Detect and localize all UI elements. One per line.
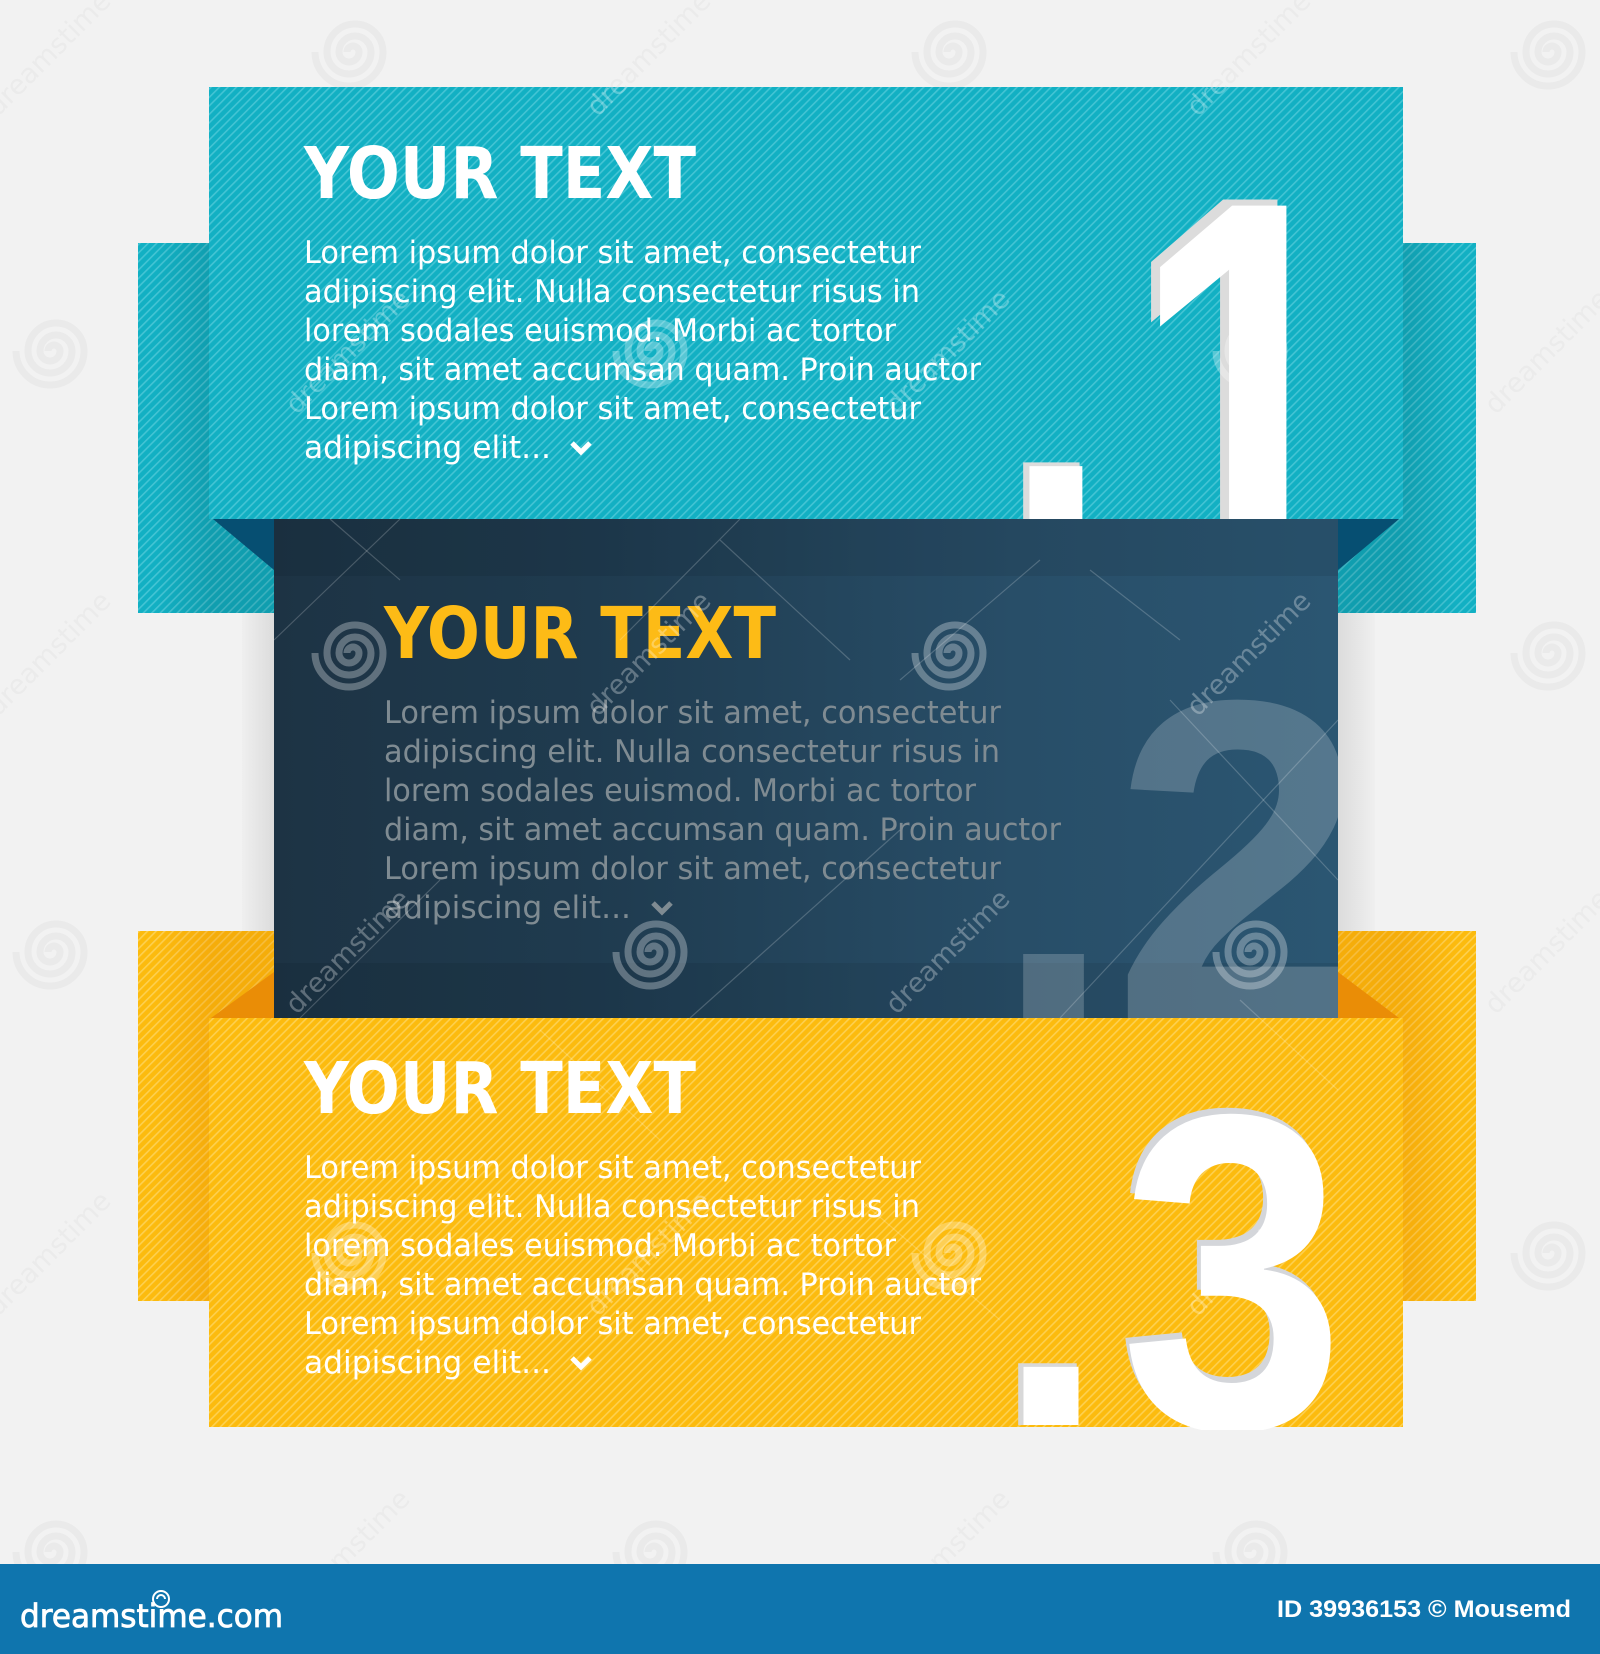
panel 2: dark: [274, 519, 1338, 1018]
numeral 2: [1023, 700, 1338, 1018]
body text 1: lorem sodales euismod. Morbi ac tortor: [304, 313, 896, 349]
body text 2: lorem sodales euismod. Morbi ac tortor: [384, 773, 976, 809]
body text 3: Lorem ipsum dolor sit amet, consectetur: [304, 1150, 921, 1186]
numeral 1: [1023, 200, 1286, 519]
watermark overlay on panels: dreamstime: [1181, 1186, 1317, 1322]
numeral 1: .: [996, 160, 1107, 607]
footer logo text: dreamstime.com: [20, 1597, 283, 1635]
body text 1: [304, 235, 981, 466]
numeral 3: 3: [1120, 1020, 1345, 1524]
heading 2: YOUR TEXT: [383, 592, 776, 675]
body text 1: diam, sit amet accumsan quam. Proin auctor: [304, 352, 981, 388]
body text 1: adipiscing elit...: [304, 430, 551, 466]
body text 3: adipiscing elit...: [304, 1345, 551, 1381]
ribbon tabs: yellow: [138, 931, 1476, 1301]
watermark overlay on panels: [274, 0, 1338, 1322]
panel 3: yellow: [209, 1018, 1403, 1430]
heading 1: YOUR TEXT: [303, 132, 696, 215]
numeral 1: 1: [1132, 86, 1364, 701]
body text 2: adipiscing elit...: [384, 890, 631, 926]
body text 2: adipiscing elit. Nulla consectetur risus in: [384, 734, 1000, 770]
body text 3: lorem sodales euismod. Morbi ac tortor: [304, 1228, 896, 1264]
icon: chevron 3: [572, 1358, 590, 1367]
body text 2: Lorem ipsum dolor sit amet, consectetur: [384, 695, 1001, 731]
numeral 3: 3: [1116, 1014, 1341, 1518]
body text 3: Lorem ipsum dolor sit amet, consectetur: [304, 1306, 921, 1342]
numeral 2: 2: [1112, 605, 1366, 1115]
ribbon tabs: teal: [138, 243, 1476, 613]
numeral 1: 1: [1122, 78, 1355, 703]
footer bar: [0, 1564, 1600, 1654]
watermark overlay on panels: dreamstime: [1181, 586, 1317, 722]
icon: chevron 1: [572, 443, 590, 452]
watermark overlay on panels: dreamstime: [581, 586, 717, 722]
body text 1: Lorem ipsum dolor sit amet, consectetur: [304, 235, 921, 271]
icon: chevron 2: [653, 903, 671, 912]
numeral 2: .: [994, 630, 1113, 1110]
numeral 1: .: [1004, 184, 1108, 602]
numeral 3: [1018, 1108, 1331, 1430]
body text 2: [384, 695, 1061, 926]
body text 2: Lorem ipsum dolor sit amet, consectetur: [384, 851, 1001, 887]
footer logo spiral: [153, 1591, 169, 1607]
footer credit: ID 39936153 © Mousemd: [1277, 1596, 1571, 1623]
numeral 3: .: [990, 1049, 1105, 1513]
body text 3: [304, 1150, 981, 1381]
watermark overlay on panels: dreamstime: [280, 284, 416, 420]
body text 3: adipiscing elit. Nulla consectetur risus in: [304, 1189, 920, 1225]
body text 3: diam, sit amet accumsan quam. Proin auctor: [304, 1267, 981, 1303]
watermark overlay on panels: dreamstime: [581, 1186, 717, 1322]
drop shadow of dark panel: [242, 613, 1375, 931]
body text 1: adipiscing elit. Nulla consectetur risus in: [304, 274, 920, 310]
fold triangles: orange: [211, 972, 1399, 1018]
watermark overlay on panels: dreamstime: [280, 884, 416, 1020]
fold triangles: teal: [213, 519, 1399, 570]
watermark overlay on panels: dreamstime: [880, 884, 1016, 1020]
heading 3: YOUR TEXT: [303, 1047, 696, 1130]
background watermark: dreamstime: [280, 1484, 416, 1620]
panel 1: teal: [209, 87, 1403, 519]
numeral 3: .: [997, 1072, 1105, 1508]
body text 1: Lorem ipsum dolor sit amet, consectetur: [304, 391, 921, 427]
body text 2: diam, sit amet accumsan quam. Proin auctor: [384, 812, 1061, 848]
watermark overlay on panels: dreamstime: [880, 284, 1016, 420]
background watermark: dreamstime: [880, 1484, 1016, 1620]
